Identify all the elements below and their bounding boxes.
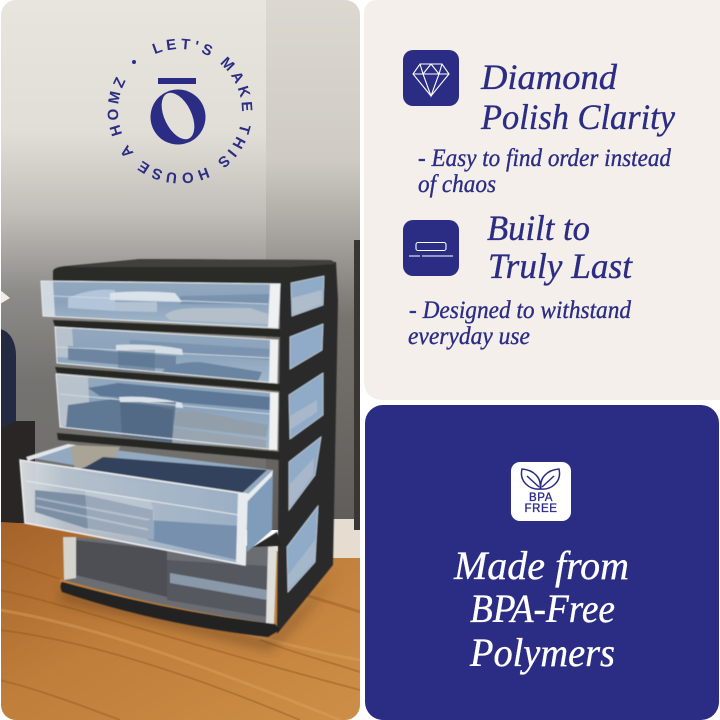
icon: bpa free badge: FREE	[524, 503, 558, 515]
baseboard	[332, 519, 360, 559]
icon: bpa free badge	[511, 462, 571, 521]
wall background	[0, 0, 360, 530]
navy pillow	[0, 329, 16, 428]
cabinet shadow	[56, 584, 328, 654]
furniture at right edge	[354, 240, 360, 530]
text: built description: everyday use	[408, 323, 530, 350]
heading: made from bpa-free polymers: Polymers	[469, 630, 615, 675]
heading: diamond polish clarity: Polish Clarity	[480, 97, 675, 137]
drawer 2	[55, 327, 278, 383]
bottom bar	[60, 582, 280, 637]
white pillow tip	[1, 290, 10, 304]
shelf bar 3	[55, 367, 280, 391]
icon: built to last	[403, 220, 459, 276]
heading: made from bpa-free polymers	[453, 543, 629, 675]
text: built description	[408, 297, 631, 350]
text: diamond description: - Easy to find order instead	[418, 145, 671, 172]
brand badge	[108, 38, 252, 184]
panel: product photo	[1, 0, 360, 720]
side windows	[287, 276, 324, 592]
heading: diamond polish clarity	[480, 57, 675, 137]
circular tagline: LET'S MAKE THIS HOUSE A HOMZ	[108, 38, 252, 184]
open drawer	[20, 444, 273, 565]
logo ring	[150, 88, 206, 144]
nightstand	[0, 421, 35, 523]
wood floor	[0, 522, 360, 720]
text: diamond description	[418, 145, 671, 198]
heading: made from bpa-free polymers: Made from	[453, 543, 629, 588]
panel: bpa free	[365, 405, 719, 720]
cabinet frame	[277, 262, 338, 634]
shelf bar 4	[57, 433, 280, 460]
icon: bpa free badge: BPA	[529, 492, 553, 504]
drawer cabinet	[20, 259, 338, 637]
icon: diamond	[403, 50, 459, 106]
text: built description: - Designed to withstand	[409, 297, 631, 324]
shelf bar 2	[53, 320, 280, 337]
heading: built to truly last: Truly Last	[488, 246, 633, 286]
dot	[132, 60, 136, 64]
heading: built to truly last	[487, 208, 633, 286]
heading: diamond polish clarity: Diamond	[480, 57, 618, 97]
drawer 1	[41, 281, 280, 328]
drawer 3	[56, 374, 278, 450]
bottom drawer	[63, 537, 277, 624]
cabinet top	[53, 259, 336, 284]
heading: built to truly last: Built to	[487, 208, 590, 248]
text: diamond description: of chaos	[418, 171, 496, 198]
logo bar	[158, 78, 196, 84]
stub rail	[253, 532, 281, 547]
heading: made from bpa-free polymers: BPA-Free	[470, 586, 615, 631]
panel: features	[364, 0, 720, 400]
